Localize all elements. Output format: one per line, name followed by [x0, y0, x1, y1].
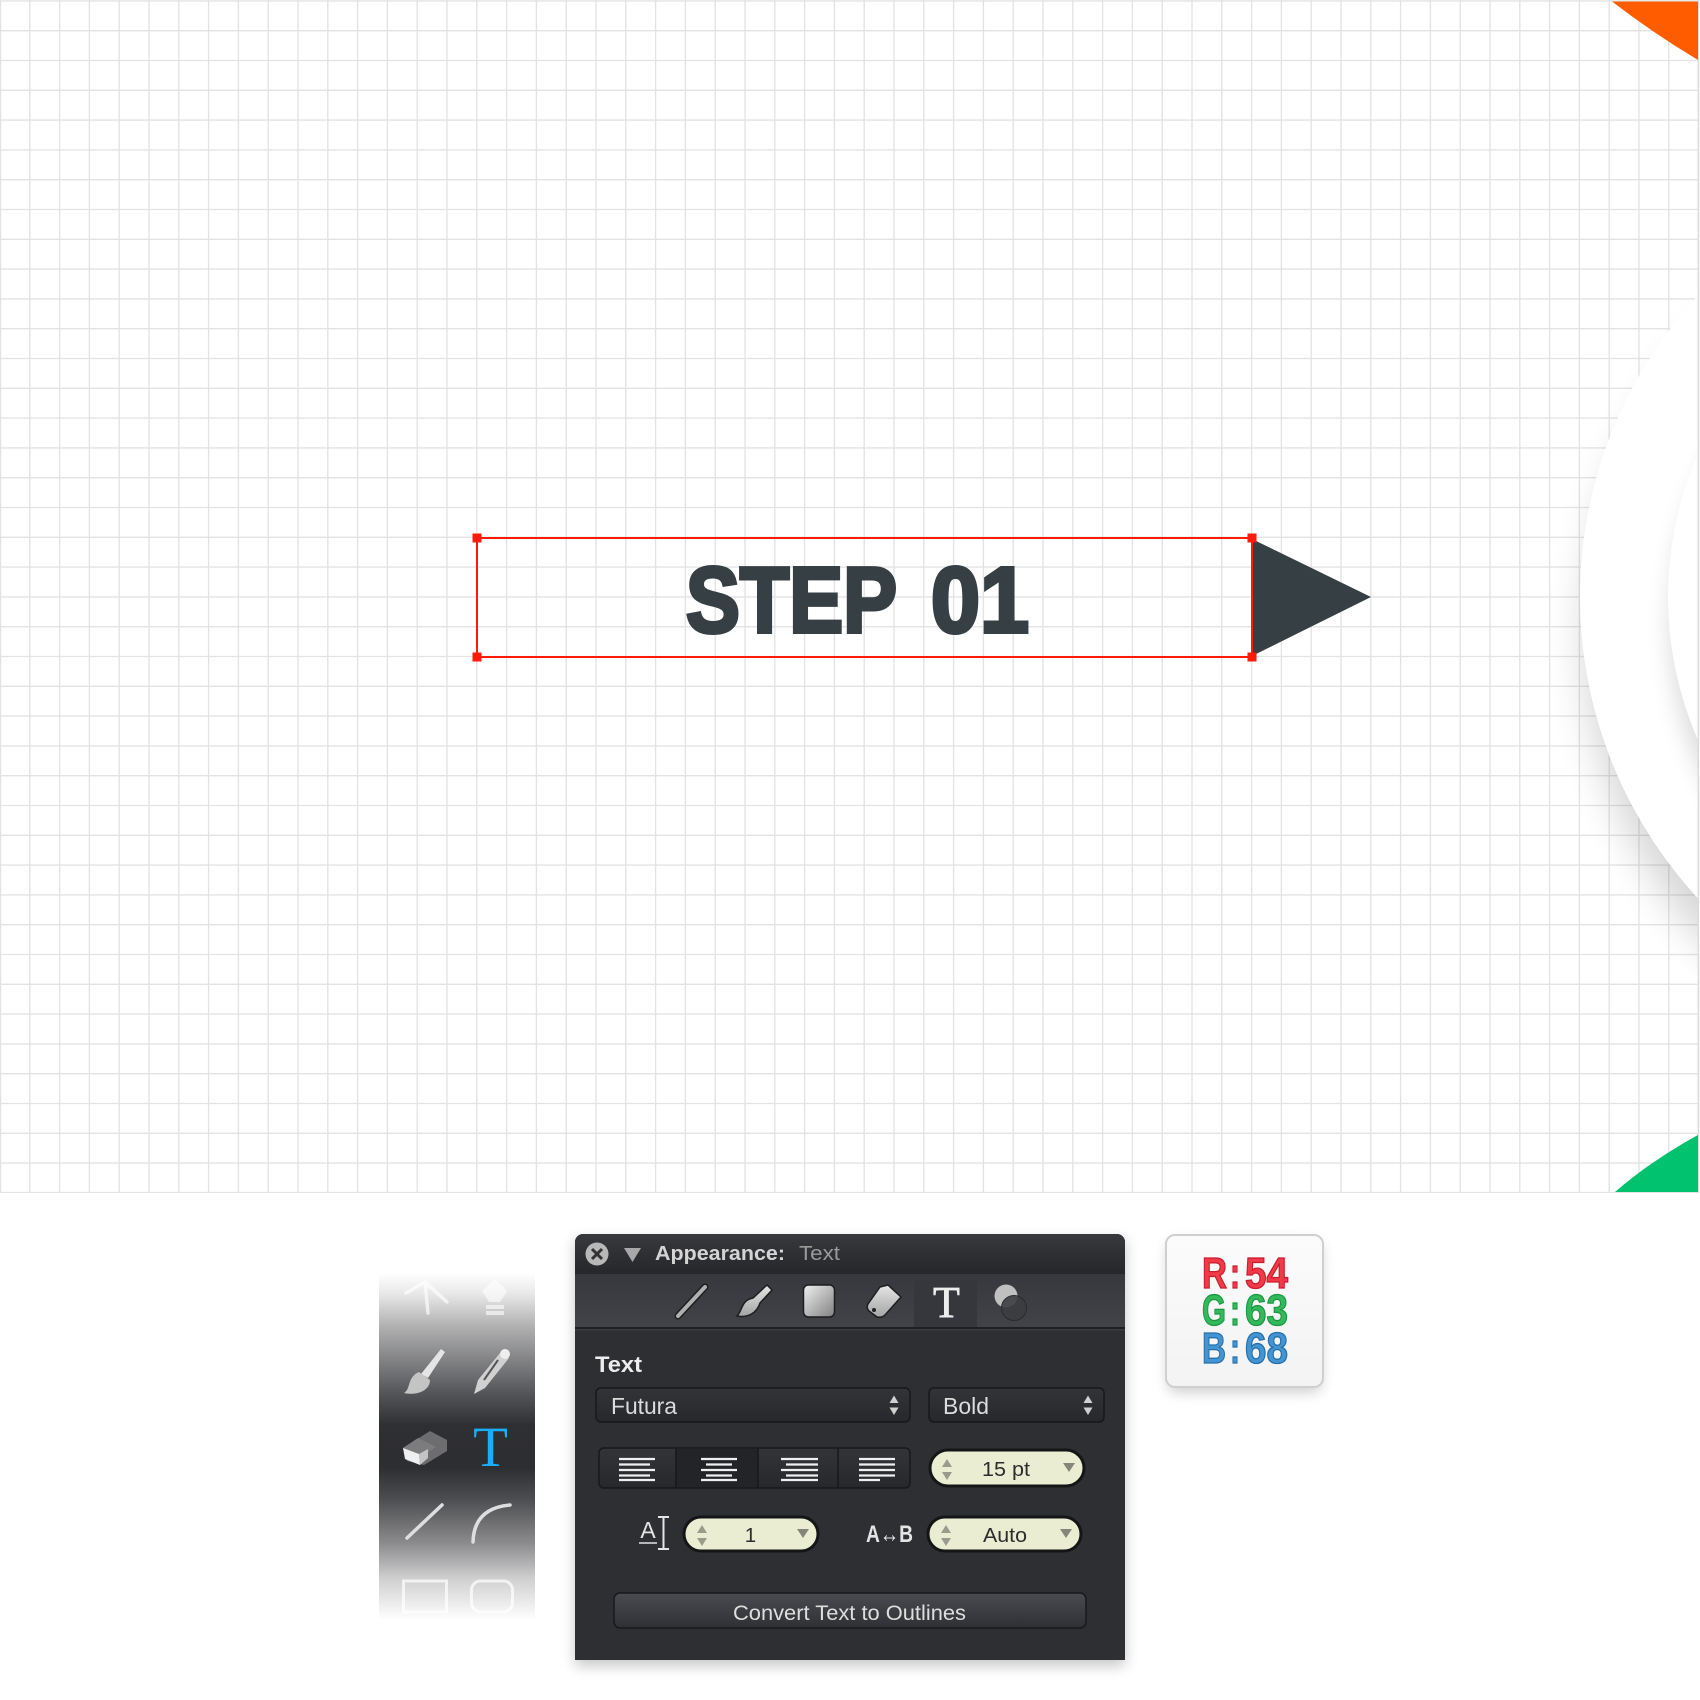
green value: 63 — [1245, 1286, 1288, 1335]
leading stepper — [684, 1517, 818, 1551]
panel shadow — [575, 1240, 1125, 1666]
icon: pencil — [474, 1349, 510, 1394]
white concentric circles at right edge — [1569, 298, 1698, 955]
card shadow — [1168, 1242, 1321, 1392]
alignment buttons — [599, 1448, 910, 1488]
artboard right border — [1697, 0, 1699, 1193]
green corner shape — [1615, 1135, 1698, 1192]
leading icon: A — [640, 1517, 656, 1543]
icon: stroke — [678, 1287, 705, 1316]
convert button — [614, 1593, 1086, 1628]
tracking stepper — [928, 1517, 1081, 1551]
arrow — [1252, 539, 1371, 656]
leading icon — [639, 1517, 669, 1549]
icon: pen — [482, 1279, 507, 1315]
title bar: Appearance: — [655, 1243, 785, 1265]
convert button: Convert Text to Outlines — [733, 1602, 966, 1625]
icon: rectangle tool — [404, 1581, 446, 1612]
panel: appearance inspector — [575, 1234, 1125, 1660]
font style dropdown — [929, 1388, 1104, 1422]
orange corner shape — [1612, 2, 1698, 60]
icon: rounded rectangle tool — [472, 1581, 512, 1612]
font size stepper — [930, 1450, 1084, 1486]
panel: tool palette strip — [379, 1273, 535, 1620]
icon: paintbrush — [404, 1349, 445, 1394]
red value: 54 — [1245, 1249, 1288, 1298]
font family dropdown — [596, 1388, 910, 1422]
tracking stepper: Auto — [983, 1524, 1027, 1547]
title bar — [575, 1234, 1125, 1274]
icon: direct selection — [406, 1282, 447, 1313]
tracking label: A↔B — [866, 1521, 913, 1548]
icon: tag — [867, 1285, 901, 1317]
leading stepper: 1 — [745, 1524, 756, 1547]
icon: eraser — [403, 1431, 447, 1465]
blue value: B — [1202, 1324, 1226, 1373]
green value: : — [1230, 1286, 1240, 1335]
red value: : — [1230, 1249, 1240, 1298]
icon: text: T — [933, 1278, 960, 1327]
step heading: 01 — [931, 548, 1029, 652]
selected text bounding box with handles — [472, 534, 1256, 662]
blue value: 68 — [1245, 1324, 1288, 1373]
toolbar — [575, 1274, 1125, 1330]
panel: colour values card — [1166, 1235, 1323, 1387]
icon: fill — [804, 1285, 834, 1317]
title bar: Text — [799, 1243, 840, 1265]
icon: type tool selected: T — [473, 1416, 508, 1479]
font style dropdown: Bold — [943, 1393, 989, 1419]
blue value: : — [1230, 1324, 1240, 1373]
icon: brush — [737, 1285, 772, 1316]
step heading: STEP — [686, 548, 897, 652]
icon: arc tool — [473, 1505, 510, 1542]
font family dropdown: Futura — [611, 1393, 677, 1419]
green value: G — [1202, 1286, 1226, 1335]
icon: line tool — [407, 1505, 442, 1538]
section label: Text — [595, 1352, 643, 1377]
red value: R — [1202, 1249, 1227, 1298]
icon: opacity circles — [994, 1284, 1026, 1320]
artboard: grid background — [0, 0, 1699, 1193]
font size stepper: 15 pt — [982, 1458, 1030, 1481]
